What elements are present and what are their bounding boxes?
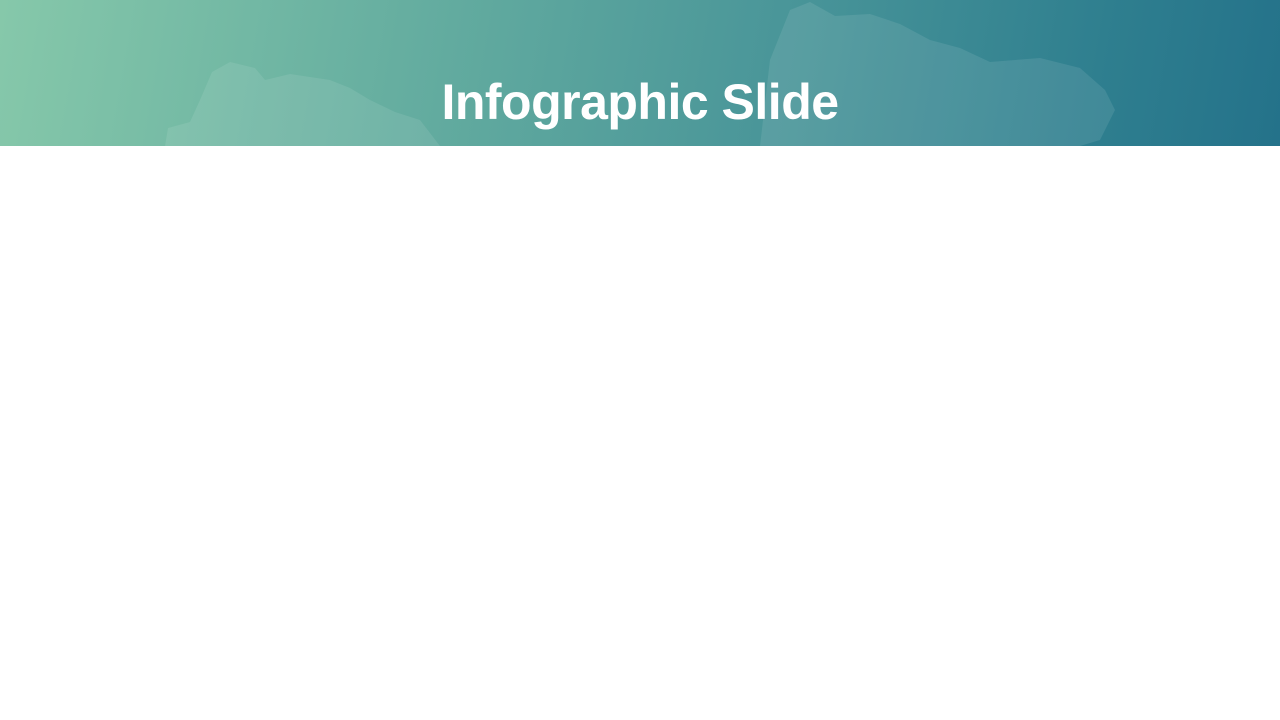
header banner [0, 0, 1280, 146]
title: Infographic Slide [441, 74, 839, 130]
decorative clouds [165, 2, 1115, 146]
